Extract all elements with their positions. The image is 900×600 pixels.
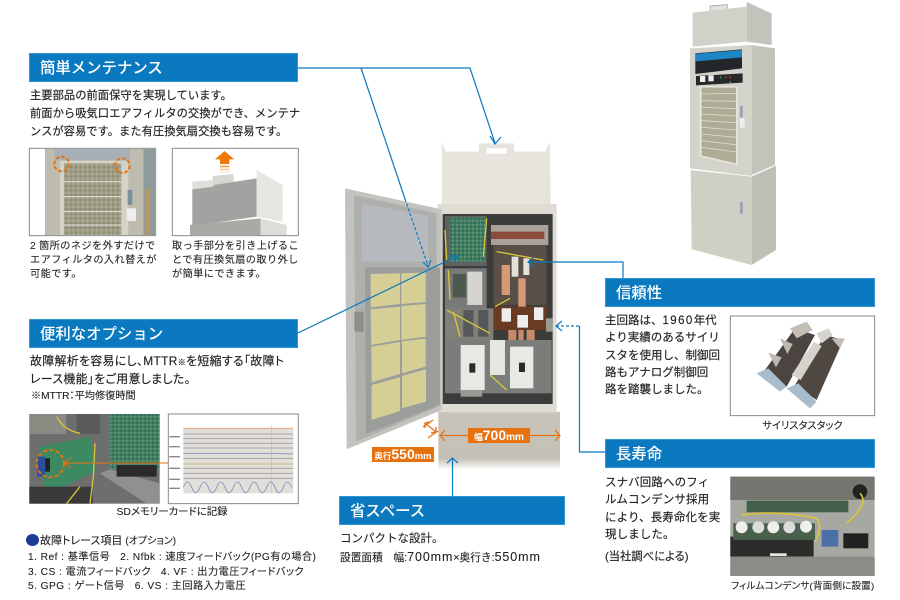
caption: fan removal (172, 240, 299, 280)
text: long life description: ルムコンデンサ採用 (605, 494, 709, 506)
heading: fault trace items: 故障トレース項目 (オプション) (40, 535, 176, 547)
text: easy maintenance description: ンスが容易です。また有圧換気扇交換も容易です。 (30, 126, 287, 138)
heading: long life (605, 439, 875, 468)
plinth (438, 412, 560, 470)
caption: fan removal: とで有圧換気扇の取り外し (172, 255, 299, 266)
body (437, 204, 557, 412)
icon: blue bullet (26, 534, 39, 546)
caption: filter replacement: エアフィルタの入れ替えが (30, 255, 157, 266)
text: space saving description: コンパクトな設計。 (340, 533, 444, 545)
text: options description: 故障解析を容易にし、MTTR※を短縮する「故障ト (30, 354, 284, 368)
text: fault trace list: 1. Ref : 基準信号 2. Nfbk : 速度フィードバック(PG有の場合) (28, 552, 316, 563)
heading: easy maintenance (29, 53, 298, 82)
text: space saving description (340, 532, 541, 564)
heading: easy maintenance: 簡単メンテナンス (40, 60, 163, 77)
heading: reliability (605, 278, 875, 307)
heading: space saving: 省スペース (350, 503, 425, 520)
caption: fan removal: 取っ手部分を引き上げるこ (172, 241, 299, 252)
caption: filter replacement: 可能です。 (30, 269, 82, 280)
text: long life note: (当社調べによる) (605, 551, 688, 563)
text: reliability description: 路を踏襲しました。 (605, 384, 708, 396)
text: long life description: により、長寿命化を実 (605, 512, 720, 524)
text: reliability description: 主回路は、1960年代 (605, 315, 717, 327)
caption: filter replacement (30, 240, 157, 280)
heading: long life: 長寿命 (616, 446, 662, 463)
label: width 700mm: 幅700mm (474, 427, 524, 443)
caption: thyristor stack: サイリスタスタック (762, 421, 843, 432)
text: reliability description: 路もアナログ制御回 (605, 367, 708, 379)
text: long life description (605, 476, 720, 541)
text: options description: レース機能」をご用意しました。 (30, 372, 191, 386)
top box (442, 142, 551, 205)
label: depth 550mm: 奥行550mm (374, 446, 432, 462)
caption: film capacitors: フィルムコンデンサ(背面側に設置) (731, 581, 874, 592)
caption: fan removal: が簡単にできます。 (172, 269, 266, 280)
text: long life description: スナバ回路へのフィ (605, 477, 709, 489)
text: space saving description: 設置面積 幅:700mm×奥行き:550mm (340, 550, 541, 564)
text: easy maintenance description: 前面から吸気口エアフィルタの交換ができ、メンテナ (30, 108, 300, 120)
text: fault trace list: 3. CS : 電流フィードバック 4. VF : 出力電圧フィードバック (28, 566, 304, 578)
text: reliability description (605, 314, 720, 396)
caption: filter replacement: 2 箇所のネジを外すだけで (30, 241, 156, 252)
text: easy maintenance description (30, 89, 300, 138)
heading: useful options: 便利なオプション (40, 326, 163, 343)
text: fault trace list (28, 551, 316, 592)
heading: useful options (29, 319, 298, 348)
caption: SD memory card: SDメモリーカードに記録 (116, 507, 228, 518)
text: fault trace list: 5. GPG : ゲート信号 6. VS : 主回路入力電圧 (28, 581, 246, 592)
text: easy maintenance description: 主要部品の前面保守を実現しています。 (30, 90, 232, 102)
heading: reliability: 信頼性 (616, 285, 662, 302)
text: reliability description: スタを使用し、制御回 (605, 350, 720, 362)
heading: space saving (339, 496, 565, 525)
text: options description (30, 354, 284, 386)
text: MTTR note: ※MTTR：平均修復時間 (31, 391, 136, 402)
door (345, 188, 442, 449)
text: long life description: 現しました。 (605, 529, 675, 541)
text: reliability description: より実績のあるサイリ (605, 332, 720, 344)
